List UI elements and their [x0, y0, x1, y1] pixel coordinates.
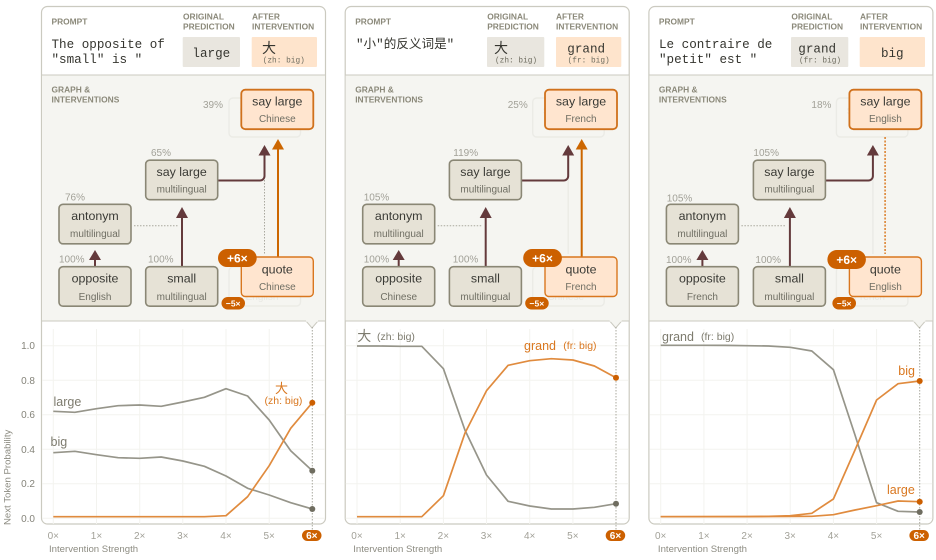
node: small: [753, 267, 825, 306]
x axis ticks: 5×: [263, 531, 275, 542]
label: big: big: [50, 435, 67, 449]
node: opposite: opposite: [72, 272, 119, 286]
node: say large English: English: [869, 114, 902, 125]
y axis labels: 1.0: [21, 341, 35, 352]
label: grand: (fr: big): [701, 331, 734, 343]
arrow: quote to output: [272, 139, 284, 258]
label: Chinese big: 大: [357, 326, 371, 346]
node: quote French: quote: [565, 262, 597, 276]
label: Chinese big: 大: [275, 378, 288, 397]
node: quote Chinese: quote: [262, 262, 293, 276]
arrow: opposite to antonym: [696, 250, 708, 267]
badge: plus 6x: +6×: [836, 253, 857, 267]
suppressed nodes: [836, 98, 908, 306]
original prediction heading: ORIGINAL: [183, 12, 224, 22]
label: grand: grand: [524, 339, 556, 353]
x axis ticks: 0×: [48, 531, 59, 542]
badge: minus 5x: [832, 297, 856, 310]
percent labels: 119%: [453, 148, 478, 159]
x axis title: Intervention Strength: [353, 544, 442, 555]
original prediction box: 大: [494, 38, 508, 58]
node: say large multilingual: [449, 160, 521, 200]
percent labels: 100%: [364, 254, 389, 266]
node: say large French: say large: [556, 94, 606, 108]
original prediction box: (zh: big): [495, 58, 537, 66]
prompt heading: PROMPT: [659, 16, 696, 26]
graph heading: GRAPH &: [355, 84, 394, 94]
original prediction box: [791, 37, 848, 67]
original prediction box: [183, 37, 240, 67]
panel: French intervention on Chinese prompt: [345, 6, 629, 555]
x axis ticks: 1×: [698, 531, 710, 542]
x axis ticks: 2×: [741, 531, 753, 542]
after intervention box: [556, 37, 621, 67]
node: quote Chinese: [241, 257, 313, 296]
percent labels: 105%: [364, 192, 389, 204]
node: quote English: quote: [870, 262, 901, 276]
node: opposite: opposite: [375, 272, 422, 286]
graph heading: GRAPH &: [52, 84, 90, 94]
badge: minus 5x: −5×: [837, 299, 852, 309]
badge: 6x tick: [302, 530, 322, 542]
badge: 6x tick: [606, 530, 625, 542]
line: big: [53, 451, 312, 509]
panel: Chinese intervention on English prompt: [2, 6, 326, 555]
original prediction box: grand: [798, 42, 836, 56]
line chart: [346, 326, 629, 555]
badge: plus 6x: [218, 249, 257, 267]
label: Chinese big: [357, 326, 415, 346]
node: say large multilingual: say large: [157, 165, 207, 179]
x axis ticks: 5×: [567, 531, 579, 542]
badge: minus 5x: [222, 297, 245, 310]
percent labels: 105%: [753, 148, 779, 159]
node: say large French: French: [565, 114, 597, 125]
node: opposite: Chinese: [380, 292, 417, 303]
original prediction heading: ORIGINAL: [791, 12, 832, 22]
after intervention heading: AFTER: [252, 12, 280, 22]
endpoints: [613, 375, 619, 507]
after intervention box: (fr: big): [568, 58, 610, 66]
badge: minus 5x: −5×: [530, 299, 544, 309]
badge: 6x tick: 6×: [913, 531, 925, 542]
after intervention box: [860, 37, 925, 67]
y axis labels: 0.8: [21, 376, 35, 387]
original prediction heading: PREDICTION: [791, 22, 843, 32]
panel: English intervention on French prompt: [649, 6, 933, 555]
x axis title: Intervention Strength: [658, 544, 747, 555]
after intervention heading: INTERVENTION: [252, 22, 314, 32]
percent labels: 100%: [453, 254, 478, 266]
line: Chinese big: [357, 346, 616, 509]
node: say large multilingual: [753, 160, 825, 200]
after intervention box: grand: [567, 42, 605, 56]
node: opposite: opposite: [679, 272, 726, 286]
dotted links: [134, 180, 264, 254]
percent labels: 18%: [811, 100, 832, 111]
label: grand: [662, 330, 734, 344]
node: say large Chinese: [241, 90, 313, 129]
x axis ticks: 3×: [481, 531, 492, 542]
line: big: [661, 381, 920, 517]
panel frame: [649, 6, 933, 524]
prompt heading: PROMPT: [52, 16, 88, 26]
badge: 6x tick: 6×: [306, 531, 318, 542]
original prediction heading: PREDICTION: [183, 22, 235, 32]
after intervention heading: AFTER: [860, 12, 888, 22]
original prediction box: [487, 37, 544, 67]
line: large: [661, 501, 920, 517]
node: antonym: multilingual: [374, 229, 424, 240]
prompt heading: PROMPT: [355, 16, 392, 26]
node: say large multilingual: [146, 160, 218, 200]
percent labels: 65%: [151, 148, 171, 159]
y axis labels: 0.0: [21, 514, 35, 525]
graph heading: GRAPH &: [659, 84, 698, 94]
node: antonym: [666, 204, 738, 244]
x axis ticks: [351, 531, 579, 542]
y axis title: Next Token Probability: [2, 430, 14, 525]
node: say large multilingual: say large: [764, 165, 815, 179]
suppressed nodes: [533, 98, 604, 306]
endpoints: [309, 400, 315, 512]
arrow: small to say large: [784, 207, 796, 267]
x axis ticks: 0×: [351, 531, 363, 542]
graph: attribution nodes and interventions: [59, 90, 313, 310]
original prediction heading: ORIGINAL: [487, 12, 528, 22]
node: small: small: [471, 272, 500, 286]
x axis ticks: 3×: [784, 531, 796, 542]
node: quote French: [545, 257, 617, 296]
suppressed nodes: [229, 98, 300, 306]
percent labels: 100%: [59, 254, 85, 266]
x axis ticks: 3×: [177, 531, 189, 542]
badge: plus 6x: [827, 250, 866, 269]
original prediction box: large: [192, 47, 230, 61]
arrow: quote to output: [576, 139, 588, 258]
y axis labels: 0.2: [21, 479, 35, 490]
x axis ticks: 4×: [220, 531, 232, 542]
graph heading: INTERVENTIONS: [659, 94, 727, 104]
label: big: big: [898, 364, 915, 378]
node: quote French: French: [565, 282, 597, 293]
suppressed nodes: English: [246, 292, 278, 303]
x axis ticks: [48, 531, 275, 542]
endpoints: [917, 378, 923, 515]
arrow: say large to output: [521, 145, 574, 180]
percent labels: 105%: [667, 194, 692, 204]
prompt text: The opposite of: [52, 38, 165, 52]
percent labels: 25%: [508, 100, 528, 111]
node: small: small: [775, 272, 804, 286]
label: grand: grand: [662, 330, 694, 344]
node: say large Chinese: say large: [252, 94, 303, 108]
after intervention box: big: [881, 47, 904, 61]
selected strength marker: [919, 327, 921, 530]
node: small: small: [167, 272, 196, 286]
line: Chinese big: [53, 403, 312, 517]
prompt text: Le contraire de: [659, 38, 772, 52]
line: grand: [661, 345, 920, 512]
x axis ticks: 1×: [91, 531, 102, 542]
selected strength marker: [615, 327, 617, 530]
node: quote English: [849, 257, 921, 296]
line: large: [53, 389, 312, 471]
label: grand: [524, 339, 597, 353]
line: grand: [357, 359, 616, 517]
after intervention box: [252, 37, 317, 67]
label: Chinese big: [264, 378, 302, 407]
badge: 6x tick: 6×: [610, 531, 621, 542]
graph: attribution nodes and interventions: [363, 90, 617, 310]
x axis ticks: 4×: [524, 531, 536, 542]
percent labels: [364, 100, 528, 266]
x axis ticks: [655, 531, 882, 542]
node: say large English: [849, 90, 921, 129]
percent labels: [59, 100, 223, 266]
line chart: [649, 327, 932, 555]
node: antonym: antonym: [71, 209, 119, 223]
label: grand: (fr: big): [563, 340, 597, 352]
label: large: large: [54, 395, 81, 409]
after intervention heading: INTERVENTION: [556, 22, 618, 32]
panel frame: [42, 6, 326, 524]
badge: plus 6x: +6×: [227, 252, 248, 266]
badge: plus 6x: +6×: [532, 252, 553, 266]
percent labels: 100%: [755, 255, 781, 266]
prompt text: "small" is ": [52, 53, 142, 67]
node: say large Chinese: Chinese: [259, 114, 296, 125]
node: quote Chinese: Chinese: [259, 282, 296, 293]
node: opposite: English: [79, 292, 111, 303]
original prediction box: (fr: big): [799, 58, 841, 66]
dotted link: quote to output: [884, 137, 886, 254]
original prediction heading: PREDICTION: [487, 22, 539, 32]
node: antonym: [59, 204, 131, 244]
prompt text: "小"的反义词是": [356, 36, 454, 52]
arrow: say large to output: [825, 145, 879, 180]
selected strength marker: [311, 327, 313, 530]
node: antonym: antonym: [679, 209, 726, 223]
arrow: opposite to antonym: [393, 250, 405, 267]
badge: 6x tick: [909, 530, 929, 542]
x axis title: Intervention Strength: [49, 544, 138, 555]
grid: [346, 329, 629, 524]
suppressed nodes: say large: [239, 103, 290, 117]
x axis ticks: 2×: [134, 531, 146, 542]
node: small: [146, 267, 218, 306]
y axis labels: 0.4: [21, 445, 35, 456]
node: say large French: [545, 90, 617, 129]
percent labels: [666, 100, 832, 266]
percent labels: 76%: [65, 192, 85, 204]
node: antonym: antonym: [375, 209, 422, 223]
node: antonym: [363, 204, 435, 244]
after intervention heading: INTERVENTION: [860, 22, 922, 32]
x axis ticks: 2×: [438, 531, 449, 542]
node: quote English: English: [869, 282, 902, 293]
node: antonym: multilingual: [677, 229, 727, 240]
graph heading: INTERVENTIONS: [355, 94, 423, 104]
percent labels: 100%: [666, 255, 692, 266]
percent labels: 100%: [148, 254, 174, 266]
node: small: [449, 267, 521, 306]
after intervention box: (zh: big): [263, 58, 305, 66]
percent labels: 39%: [203, 100, 223, 111]
label: Chinese big: (zh: big): [264, 395, 302, 407]
label: Chinese big: (zh: big): [377, 331, 415, 343]
node: small: multilingual: [157, 292, 207, 303]
node: say large multilingual: say large: [460, 165, 511, 179]
node: antonym: multilingual: [70, 229, 120, 240]
node: opposite: [363, 267, 435, 306]
suppressed nodes: French: [854, 292, 885, 303]
dotted link: [438, 225, 482, 227]
x axis ticks: 4×: [828, 531, 839, 542]
node: opposite: [59, 267, 131, 306]
panel frame: [345, 6, 629, 524]
y axis labels: [21, 341, 35, 525]
grid: [42, 329, 325, 524]
arrow: opposite to antonym: [89, 250, 101, 267]
graph heading: INTERVENTIONS: [52, 94, 120, 104]
graph: attribution nodes and interventions: [666, 90, 921, 310]
x axis ticks: 5×: [871, 531, 882, 542]
node: small: multilingual: [764, 292, 814, 303]
label: large: large: [887, 483, 915, 497]
badge: minus 5x: [525, 297, 549, 310]
badge: minus 5x: −5×: [226, 299, 241, 309]
x axis ticks: 0×: [655, 531, 667, 542]
arrow: say large to output: [218, 145, 270, 180]
prompt text: "petit" est ": [659, 53, 757, 67]
node: opposite: [666, 267, 738, 306]
suppressed nodes: say large: [543, 103, 593, 117]
y axis labels: 0.6: [21, 410, 35, 421]
node: say large English: say large: [860, 94, 911, 108]
dotted link: [741, 225, 785, 227]
after intervention box: 大: [262, 38, 276, 58]
node: opposite: French: [687, 292, 718, 303]
x axis ticks: 1×: [394, 531, 406, 542]
node: say large multilingual: multilingual: [157, 184, 207, 196]
arrow: small to say large: [176, 207, 188, 267]
after intervention heading: AFTER: [556, 12, 584, 22]
grid: [649, 329, 932, 524]
suppressed nodes: say large: [847, 103, 897, 117]
node: say large multilingual: multilingual: [460, 184, 510, 196]
badge: plus 6x: [523, 249, 562, 267]
arrow: small to say large: [480, 207, 492, 267]
node: say large multilingual: multilingual: [764, 184, 814, 196]
suppressed nodes: Chinese: [547, 292, 584, 303]
node: small: multilingual: [460, 292, 510, 303]
line chart: [2, 327, 325, 555]
